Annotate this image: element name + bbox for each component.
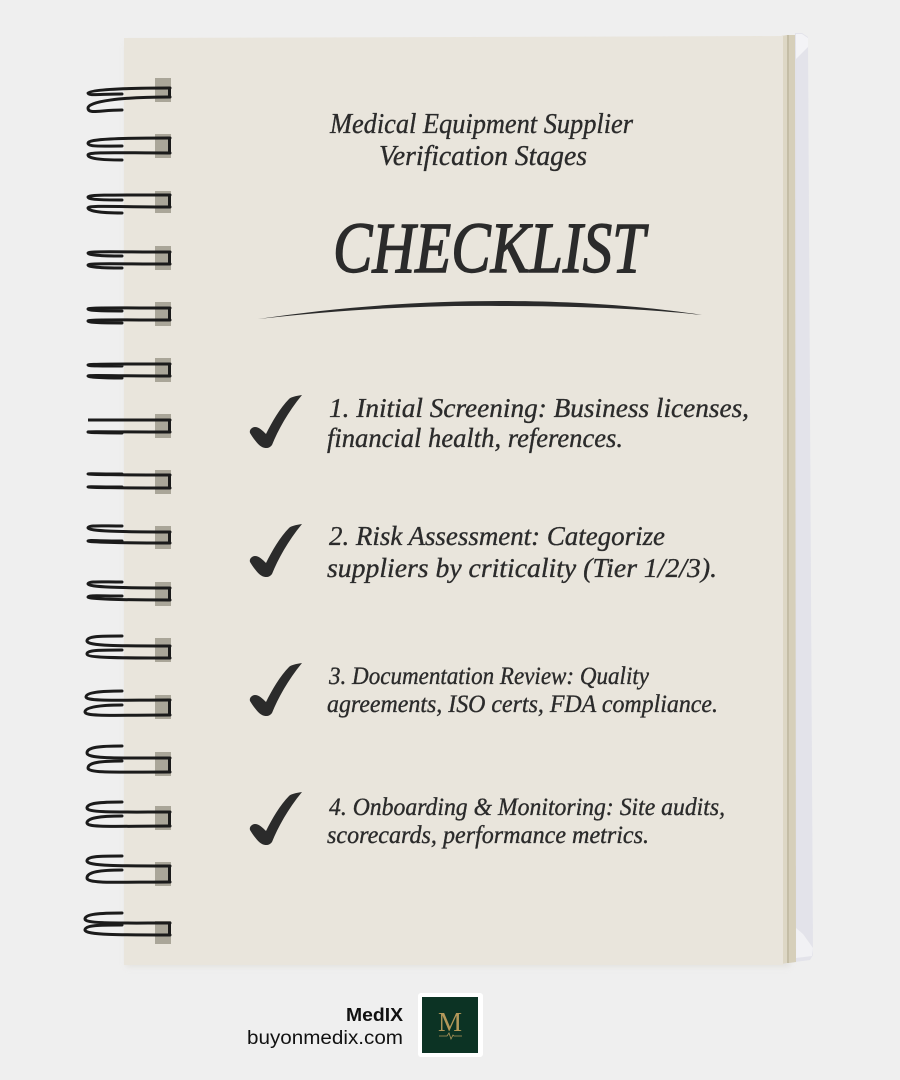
item 2 text: suppliers by criticality (Tier 1/2/3). [327,553,717,583]
icon: check mark [250,395,302,448]
ring 10 [88,582,171,606]
checklist [250,393,749,849]
subtitle: Medical Equipment Supplier [329,109,633,140]
ring 13 [87,746,171,776]
ring 2 [88,134,171,160]
item 4 text: 4. Onboarding & Monitoring: Site audits, [329,794,725,821]
ring 8 [88,470,171,494]
ring 14 [87,802,171,830]
ring 9 [88,526,171,549]
ring 7 [88,414,171,438]
item 1 text [327,393,749,453]
title underline [258,301,702,319]
icon: check mark [250,524,302,577]
item 3 text: 3. Documentation Review: Quality [328,663,650,690]
item 1 text: 1. Initial Screening: Business licenses, [329,393,749,423]
item 3 text: agreements, ISO certs, FDA compliance. [327,691,718,718]
notebook page [124,36,783,965]
item 2 [250,521,717,583]
footer brand [247,993,483,1057]
brand name: MedIX [346,1005,403,1025]
ring 12 [85,691,171,719]
ring 4 [88,246,171,270]
ring 15 [87,856,171,886]
notebook [124,33,813,967]
item 4 text: scorecards, performance metrics. [327,822,649,849]
ring 16 [85,913,171,944]
icon: check mark [250,792,302,845]
subtitle [329,109,633,172]
ring 3 [88,191,171,213]
ring 5 [88,302,171,326]
icon: check mark [250,663,302,716]
logo [418,993,483,1057]
item 1 [250,393,749,453]
item 3 text [327,663,718,718]
item 3 [250,663,718,718]
spiral binding [85,78,171,944]
item 4 text [327,794,725,849]
page stack edge [126,35,796,967]
item 2 text [327,521,717,583]
ring 1 [88,78,171,112]
back cover [795,33,813,962]
website: buyonmedix.com [247,1028,403,1049]
subtitle: Verification Stages [379,141,587,172]
item 2 text: 2. Risk Assessment: Categorize [329,521,665,551]
logo: M [438,1007,462,1037]
item 1 text: financial health, references. [327,423,623,453]
item 4 [250,792,725,849]
ring 11 [87,636,171,662]
ring 6 [88,358,171,382]
title: CHECKLIST [333,208,649,288]
